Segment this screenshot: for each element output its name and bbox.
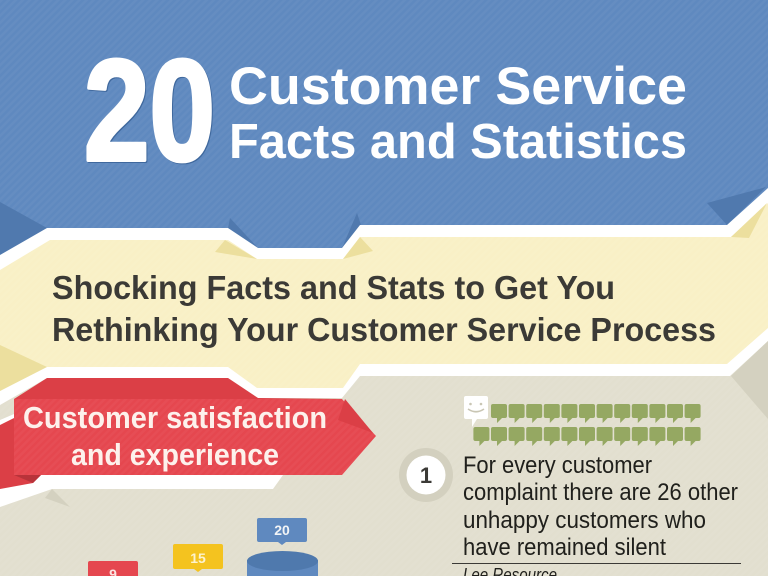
red banner tail bbox=[0, 418, 41, 489]
chart label: 15 bbox=[173, 544, 223, 572]
panel: cream subtitle ribbon bbox=[0, 203, 768, 391]
icon: green bubble row one bbox=[491, 404, 701, 423]
title: Customer Service bbox=[229, 57, 687, 116]
cream ribbon folds bbox=[0, 203, 767, 391]
chart label: 20: 20 bbox=[274, 522, 290, 538]
panel: white backing under red banner bbox=[0, 400, 376, 507]
subtitle: Shocking Facts and Stats to Get You bbox=[52, 269, 615, 306]
icon: green bubble row two bbox=[473, 427, 701, 446]
chart label: 9 bbox=[88, 561, 138, 576]
fact text: complaint there are 26 other bbox=[463, 479, 738, 506]
panel: red banner bbox=[0, 378, 376, 489]
bar chart bbox=[88, 518, 318, 576]
subtitle: Rethinking Your Customer Service Process bbox=[52, 311, 716, 348]
title: Facts and Statistics bbox=[229, 115, 687, 169]
red banner heading: Customer satisfaction bbox=[23, 400, 327, 435]
chart label: 20 bbox=[257, 518, 307, 545]
red banner heading: and experience bbox=[71, 437, 279, 472]
icon: white smiling bubble bbox=[464, 396, 488, 427]
icon: grey banner fold bbox=[45, 489, 70, 507]
fact text: unhappy customers who bbox=[463, 507, 706, 534]
subtitle bbox=[52, 269, 716, 348]
panel: blue header background bbox=[0, 0, 768, 290]
fact text: For every customer bbox=[463, 452, 652, 479]
icon: customer complaint speech bubbles bbox=[464, 396, 701, 446]
panel: grey content background bbox=[0, 330, 768, 576]
red banner back ribbon bbox=[14, 378, 342, 420]
red banner arrow fold bbox=[338, 399, 373, 433]
fact number badge: 1 bbox=[420, 463, 432, 488]
red banner tail fold bbox=[14, 475, 41, 483]
title number: 20 bbox=[84, 30, 215, 191]
blue ribbon folds bbox=[0, 187, 766, 256]
fact number badge bbox=[399, 448, 453, 502]
fact text: have remained silent bbox=[463, 534, 666, 561]
fact text bbox=[463, 452, 738, 561]
white ribbon band bbox=[0, 188, 768, 405]
chart cylinder bbox=[247, 551, 318, 576]
red banner front bbox=[14, 399, 376, 475]
title bbox=[229, 57, 687, 169]
chart label: 15: 15 bbox=[190, 550, 206, 566]
red banner heading bbox=[23, 400, 327, 472]
grey ribbon fold bbox=[731, 341, 768, 419]
